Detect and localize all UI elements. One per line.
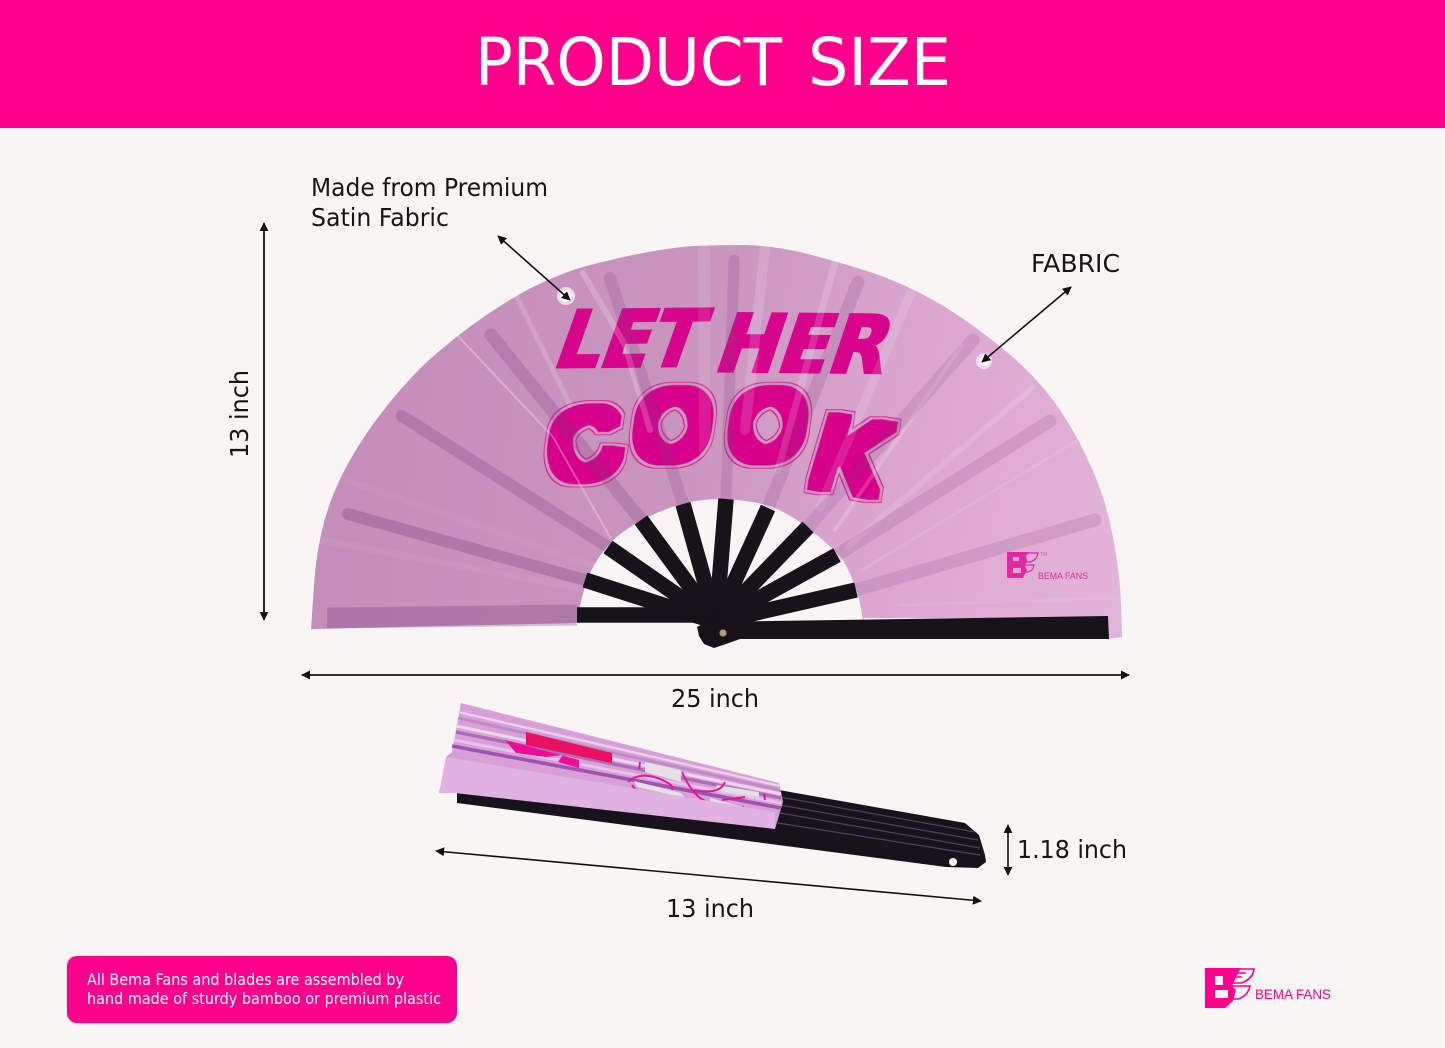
fan fabric — [311, 245, 1122, 639]
arrow: folded length — [436, 851, 981, 901]
eyelet left — [557, 287, 575, 305]
slogan: COOK: COOK — [527, 367, 908, 517]
handle and rivet — [697, 616, 1109, 648]
fan brand mark: TM — [1040, 552, 1047, 558]
pleat lines — [452, 712, 781, 808]
slogan: LET HER: LET — [544, 293, 719, 385]
fabric highlights — [320, 248, 1120, 605]
folded fan — [439, 703, 986, 868]
note box — [67, 956, 457, 1023]
hub stick sections — [577, 499, 856, 622]
label: folded length: 13 inch — [666, 894, 754, 923]
label: fan height: 13 inch — [225, 370, 254, 458]
arrow: fan width — [302, 674, 1129, 676]
folded sticks — [457, 790, 986, 868]
note box: hand made of sturdy bamboo or premium plastic — [87, 989, 441, 1008]
callout: satin fabric: Made from Premium — [311, 173, 548, 202]
title: SIZE — [808, 24, 951, 101]
label: fan width: 25 inch — [671, 684, 759, 713]
slogan: LET HER: HER — [705, 299, 906, 392]
arrow: fabric — [982, 287, 1071, 362]
brand logo — [1205, 968, 1331, 1008]
arrow: folded height — [1007, 825, 1009, 875]
print fragments — [505, 732, 765, 812]
title: PRODUCT — [475, 24, 783, 101]
brand logo: BEMA FANS — [1255, 986, 1331, 1002]
fan brand mark — [1007, 552, 1088, 582]
fan brand mark: BEMA FANS — [1038, 571, 1088, 582]
label: folded height: 1.18 inch — [1017, 835, 1127, 864]
eyelet right — [976, 353, 992, 369]
note box: All Bema Fans and blades are assembled by — [87, 970, 404, 989]
arrow: satin fabric — [498, 236, 570, 300]
slogan: LET HER — [544, 293, 906, 392]
label: fabric: FABRIC — [1031, 249, 1120, 278]
folded lower flap — [439, 757, 775, 829]
callout: satin fabric: Satin Fabric — [311, 203, 449, 232]
fabric ribs — [327, 260, 1095, 618]
callout: satin fabric — [311, 173, 548, 232]
open fan — [311, 245, 1122, 648]
header banner — [0, 0, 1445, 128]
arrow: fan height — [263, 223, 265, 620]
folded pleats — [446, 703, 783, 829]
